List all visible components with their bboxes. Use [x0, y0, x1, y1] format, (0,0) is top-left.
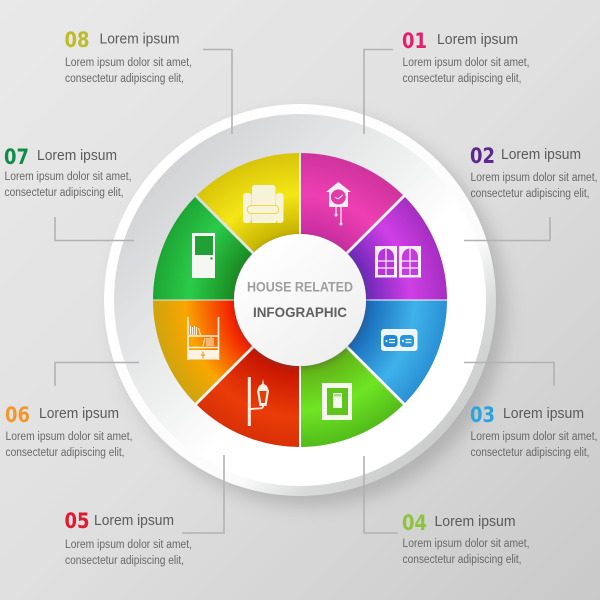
text block 01: consectetur adipiscing elit, — [402, 73, 522, 85]
connector 02 — [464, 217, 550, 240]
icon: double window — [375, 246, 421, 278]
text block 06 — [5, 403, 132, 459]
heading: infographic: INFOGRAPHIC — [253, 305, 347, 320]
text block 04: Lorem ipsum dolor sit amet, — [402, 538, 530, 550]
text block 05: Lorem ipsum dolor sit amet, — [65, 539, 192, 551]
text block 07 — [4, 145, 132, 199]
icon: cuckoo clock — [326, 182, 351, 226]
segment 01 magenta — [301, 153, 403, 252]
icon: light switch — [322, 383, 352, 420]
segment 08 yellow — [197, 153, 299, 252]
segment 03 blue — [348, 300, 447, 403]
icon: armchair — [243, 185, 284, 223]
text block 03: 03 — [470, 403, 495, 427]
panel: outer white ring — [104, 104, 496, 496]
connector 03 — [464, 362, 554, 386]
text block 05: Lorem ipsum — [94, 512, 174, 529]
panel: centre hub — [234, 234, 366, 366]
text block 07: Lorem ipsum — [37, 147, 117, 164]
text block 07: Lorem ipsum dolor sit amet, — [4, 171, 132, 183]
text block 04: 04 — [402, 511, 427, 535]
text block 04 — [402, 511, 530, 566]
text block 02: 02 — [470, 144, 495, 168]
panel: colour wheel — [153, 153, 447, 447]
text block 02 — [470, 144, 598, 200]
text block 06: Lorem ipsum — [39, 405, 119, 422]
connector 08 — [203, 50, 232, 134]
hub shadow — [234, 235, 368, 369]
text block 01: Lorem ipsum dolor sit amet, — [402, 57, 530, 69]
text block 08: consectetur adipiscing elit, — [65, 73, 184, 85]
text block 06: 06 — [5, 403, 30, 427]
text block 02: Lorem ipsum — [501, 146, 581, 163]
text block 05: consectetur adipiscing elit, — [65, 555, 184, 567]
segment 06 orange — [153, 300, 252, 403]
text block 03 — [470, 403, 598, 459]
connector 05 — [182, 455, 224, 533]
icon: wall lamp — [248, 377, 269, 426]
text block 04: consectetur adipiscing elit, — [402, 554, 522, 566]
text block 08: Lorem ipsum dolor sit amet, — [65, 57, 192, 69]
connector 07 — [55, 217, 134, 240]
segment 04 green — [301, 348, 403, 447]
text block 06: consectetur adipiscing elit, — [6, 447, 124, 459]
ring shadow — [114, 114, 506, 506]
icon: bookshelf — [188, 317, 218, 360]
connector 01 — [364, 50, 393, 134]
text block 05: 05 — [64, 509, 90, 533]
text block 08: Lorem ipsum — [100, 30, 180, 48]
text block 06: Lorem ipsum dolor sit amet, — [6, 431, 132, 443]
text block 07: consectetur adipiscing elit, — [4, 187, 124, 199]
text block 04: Lorem ipsum — [434, 513, 516, 530]
connector 06 — [55, 362, 139, 386]
segment 05 red — [197, 348, 299, 447]
panel: inner disc — [114, 114, 486, 486]
text block 08: 08 — [64, 28, 90, 52]
icon: wall outlet — [381, 329, 418, 351]
text block 03: Lorem ipsum — [503, 405, 584, 422]
segment 02 purple — [348, 197, 447, 300]
text block 01 — [402, 29, 530, 85]
segment 07 dark green — [153, 197, 252, 300]
heading: house related: HOUSE RELATED — [247, 280, 353, 294]
text block 01: Lorem ipsum — [437, 31, 518, 48]
text block 01: 01 — [402, 29, 427, 53]
text block 07: 07 — [4, 145, 29, 169]
text block 08 — [64, 28, 192, 85]
text block 05 — [64, 509, 192, 567]
icon: door — [192, 233, 215, 278]
connector 04 — [364, 456, 398, 533]
